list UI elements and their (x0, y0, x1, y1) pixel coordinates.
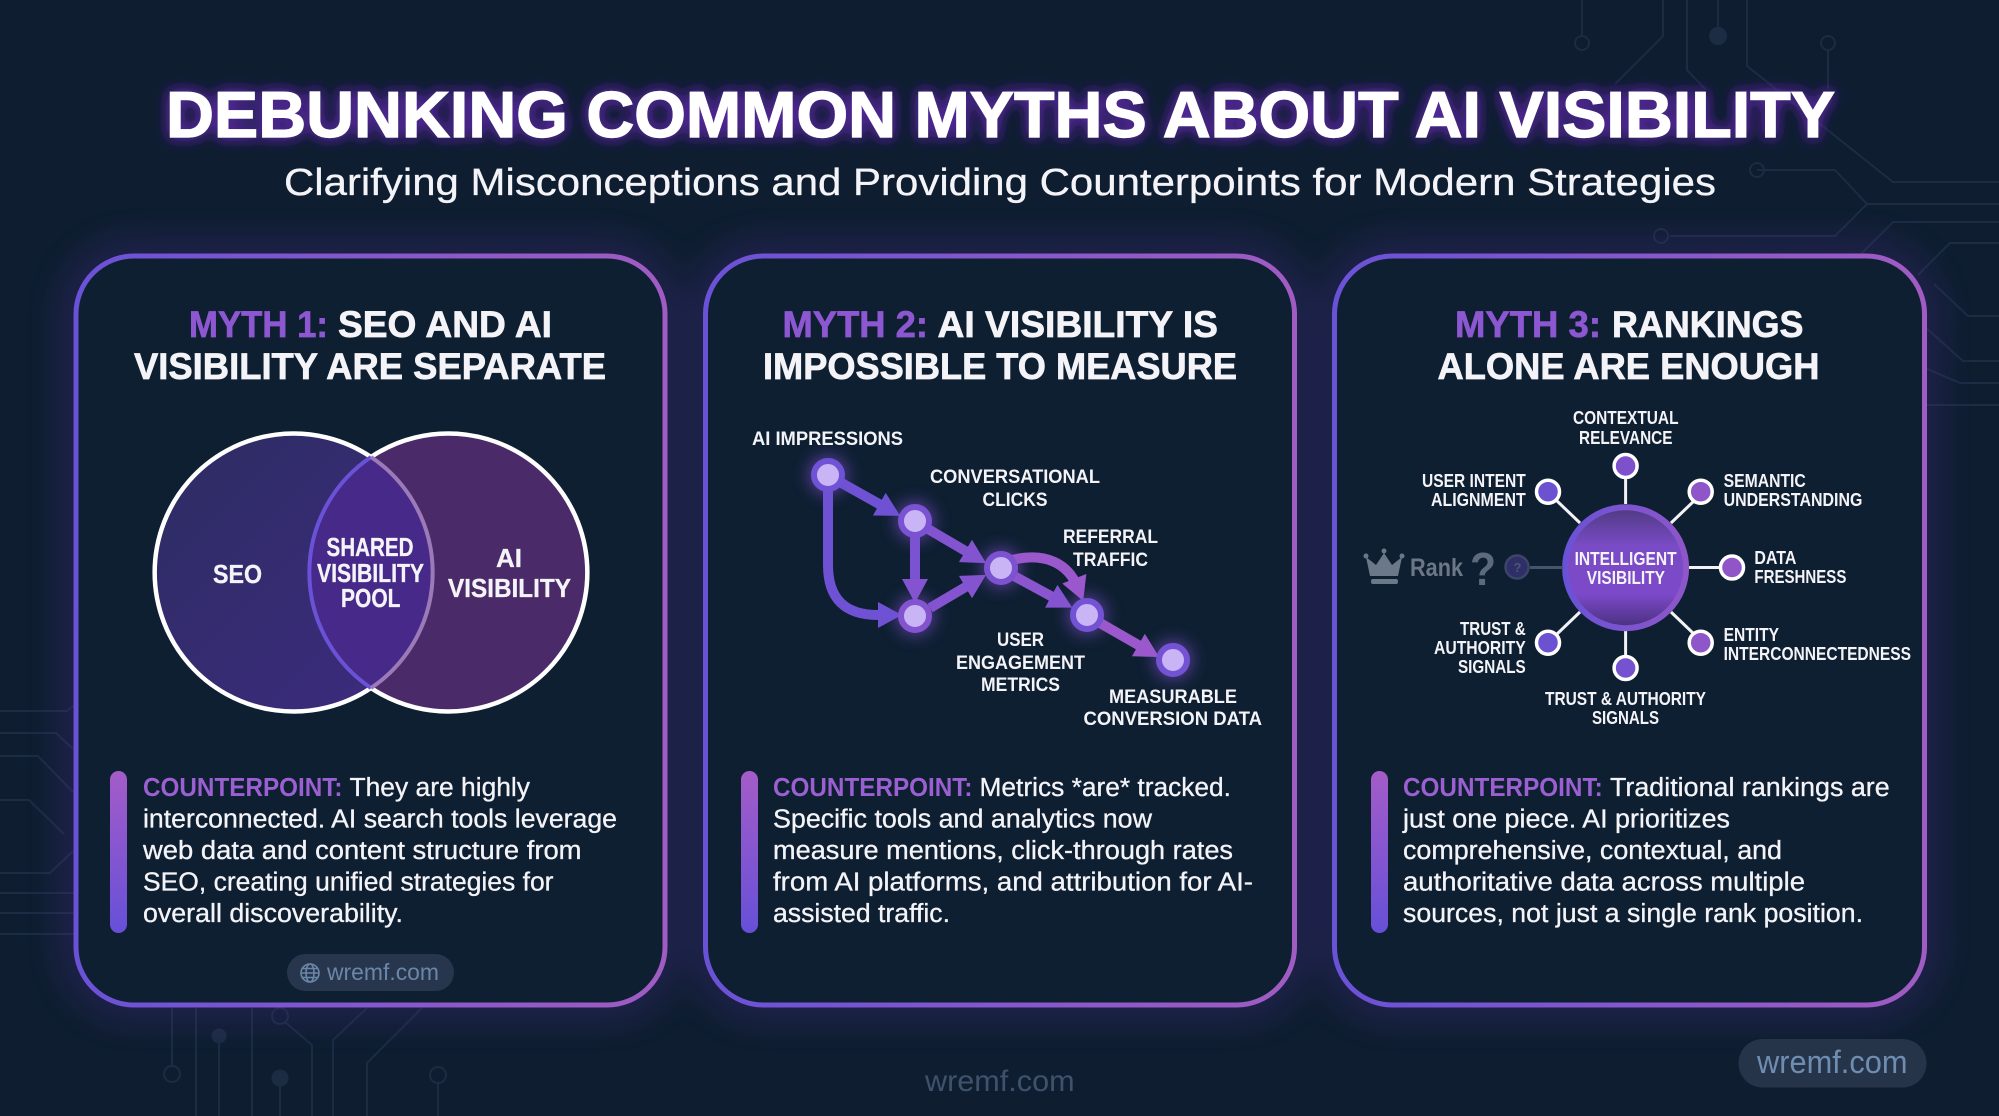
faded rank group (1364, 543, 1563, 595)
venn diagram (155, 434, 587, 712)
counterpoint text: interconnected. AI search tools leverage (143, 806, 617, 834)
satellite nodes (1536, 454, 1744, 680)
counterpoint text: Traditional rankings are (1610, 774, 1890, 802)
counterpoint text: just one piece. AI prioritizes (1402, 806, 1730, 834)
label: user intent alignment: USER INTENT (1422, 471, 1526, 491)
counterpoint text: from AI platforms, and attribution for AI- (773, 868, 1253, 896)
hub label: VISIBILITY (1587, 568, 1665, 588)
hub and spoke diagram (1364, 408, 1911, 728)
node glows (808, 455, 1193, 680)
counterpoint text: They are highly (350, 774, 530, 802)
label: trust and authority signals left: AUTHORITY (1434, 638, 1526, 658)
heading: myth 2: MYTH 2: (782, 304, 928, 345)
counterpoint text: assisted traffic. (773, 900, 950, 928)
label: measurable conversion data: MEASURABLE (1109, 686, 1237, 708)
label: SEO: SEO (213, 561, 262, 589)
heading: myth 3: MYTH 3: (1455, 304, 1601, 345)
subtitle: Clarifying Misconceptions and Providing Counterpoints for Modern Strategies (284, 162, 1716, 204)
counterpoint text: authoritative data across multiple (1403, 868, 1805, 896)
counterpoint bar (741, 771, 758, 933)
label: shared visibility pool: POOL (341, 585, 400, 613)
heading: myth 3: RANKINGS (1612, 304, 1804, 345)
label: conversational clicks (930, 466, 1100, 511)
label: trust and authority signals bottom: SIGNALS (1592, 708, 1659, 728)
watermark chip: bottom right: wremf.com (1756, 1044, 1908, 1080)
hub (1565, 507, 1686, 628)
watermark chip: wremf.com (326, 959, 439, 985)
label: entity interconnectedness: ENTITY (1724, 625, 1779, 645)
label: user engagement metrics: METRICS (981, 674, 1060, 696)
heading: myth 2 (763, 304, 1237, 387)
label: user engagement metrics: ENGAGEMENT (956, 652, 1085, 674)
counterpoint bar (110, 771, 127, 933)
faded rank group: ? (1470, 543, 1496, 595)
heading: myth 3: ALONE ARE ENOUGH (1438, 346, 1820, 387)
counterpoint text (773, 774, 1253, 928)
title: DEBUNKING COMMON MYTHS ABOUT AI VISIBILITY (166, 78, 1835, 151)
panel: myth 1 (76, 256, 665, 1005)
label: referral traffic (1063, 526, 1158, 571)
label: AI visibility (448, 545, 571, 603)
label: shared visibility pool: SHARED (326, 534, 414, 562)
label: semantic understanding: SEMANTIC (1724, 471, 1806, 491)
label: trust and authority signals bottom: TRUST & AUTHORITY (1545, 689, 1706, 709)
label: contextual relevance: CONTEXTUAL (1573, 408, 1678, 428)
label: measurable conversion data: CONVERSION DATA (1084, 708, 1262, 730)
hub label (1575, 549, 1677, 588)
label: entity interconnectedness (1724, 625, 1911, 664)
circuit pattern: left (0, 706, 73, 934)
watermark chip: bottom right (1738, 1039, 1926, 1088)
flow diagram (752, 428, 1262, 730)
heading: myth 2: IMPOSSIBLE TO MEASURE (763, 346, 1237, 387)
label: semantic understanding (1724, 471, 1862, 510)
label: referral traffic: TRAFFIC (1073, 549, 1148, 571)
label: AI impressions: AI IMPRESSIONS (752, 428, 903, 450)
label: user intent alignment: ALIGNMENT (1431, 490, 1526, 510)
heading: myth 1: VISIBILITY ARE SEPARATE (134, 346, 606, 387)
counterpoint text: web data and content structure from (142, 837, 582, 865)
heading: myth 2: AI VISIBILITY IS (938, 304, 1218, 345)
watermark: bottom center: wremf.com (924, 1065, 1075, 1098)
counterpoint text: COUNTERPOINT: (143, 774, 342, 802)
label: user engagement metrics (956, 629, 1085, 696)
icon: crown (1364, 548, 1404, 584)
counterpoint text: COUNTERPOINT: (773, 774, 972, 802)
label: AI visibility: AI (496, 545, 522, 573)
arrows (828, 481, 1147, 650)
panel: myth 2 (706, 256, 1294, 1005)
label: data freshness: FRESHNESS (1754, 567, 1846, 587)
label: trust and authority signals left: TRUST & (1460, 619, 1526, 639)
label: user intent alignment (1422, 471, 1526, 510)
counterpoint text (1402, 774, 1890, 928)
faded rank group: ? (1514, 560, 1522, 575)
counterpoint text: overall discoverability. (143, 900, 403, 928)
counterpoint bar (1371, 771, 1388, 933)
counterpoint text (142, 774, 617, 928)
label: data freshness (1754, 548, 1846, 587)
counterpoint text: sources, not just a single rank position. (1403, 900, 1863, 928)
label: conversational clicks: CONVERSATIONAL (930, 466, 1100, 488)
circuit pattern: top right (1575, 0, 1999, 405)
heading: myth 1: SEO AND AI (338, 304, 552, 345)
label: shared visibility pool: VISIBILITY (317, 560, 424, 588)
label: user engagement metrics: USER (997, 629, 1044, 651)
card glow (75, 255, 1924, 1005)
label: contextual relevance: RELEVANCE (1579, 428, 1672, 448)
label: data freshness: DATA (1754, 548, 1796, 568)
label: trust and authority signals left: SIGNALS (1458, 657, 1526, 677)
watermark chip (287, 954, 454, 991)
icon: globe (301, 964, 319, 982)
circuit pattern: bottom (164, 1008, 446, 1116)
counterpoint text: measure mentions, click-through rates (773, 837, 1233, 865)
label: measurable conversion data (1084, 686, 1262, 730)
faded rank group: Rank (1410, 554, 1463, 582)
heading: myth 1: MYTH 1: (189, 304, 328, 345)
hub label: INTELLIGENT (1575, 549, 1677, 569)
label: trust and authority signals bottom (1545, 689, 1706, 728)
counterpoint text: Specific tools and analytics now (773, 806, 1153, 834)
counterpoint text: Metrics *are* tracked. (980, 774, 1231, 802)
label: contextual relevance (1573, 408, 1678, 448)
panel: myth 3 (1334, 256, 1924, 1005)
label: referral traffic: REFERRAL (1063, 526, 1158, 548)
heading: myth 3 (1438, 304, 1820, 387)
label: shared visibility pool (317, 534, 424, 613)
nodes (814, 461, 1187, 674)
counterpoint text: SEO, creating unified strategies for (143, 868, 554, 896)
counterpoint text: comprehensive, contextual, and (1403, 837, 1782, 865)
heading: myth 1 (134, 304, 606, 387)
label: semantic understanding: UNDERSTANDING (1724, 490, 1862, 510)
label: trust and authority signals left (1434, 619, 1526, 677)
label: entity interconnectedness: INTERCONNECTEDNESS (1724, 644, 1911, 664)
spokes (1556, 478, 1720, 656)
label: AI visibility: VISIBILITY (448, 575, 571, 603)
label: conversational clicks: CLICKS (982, 489, 1048, 511)
counterpoint text: COUNTERPOINT: (1403, 774, 1603, 802)
